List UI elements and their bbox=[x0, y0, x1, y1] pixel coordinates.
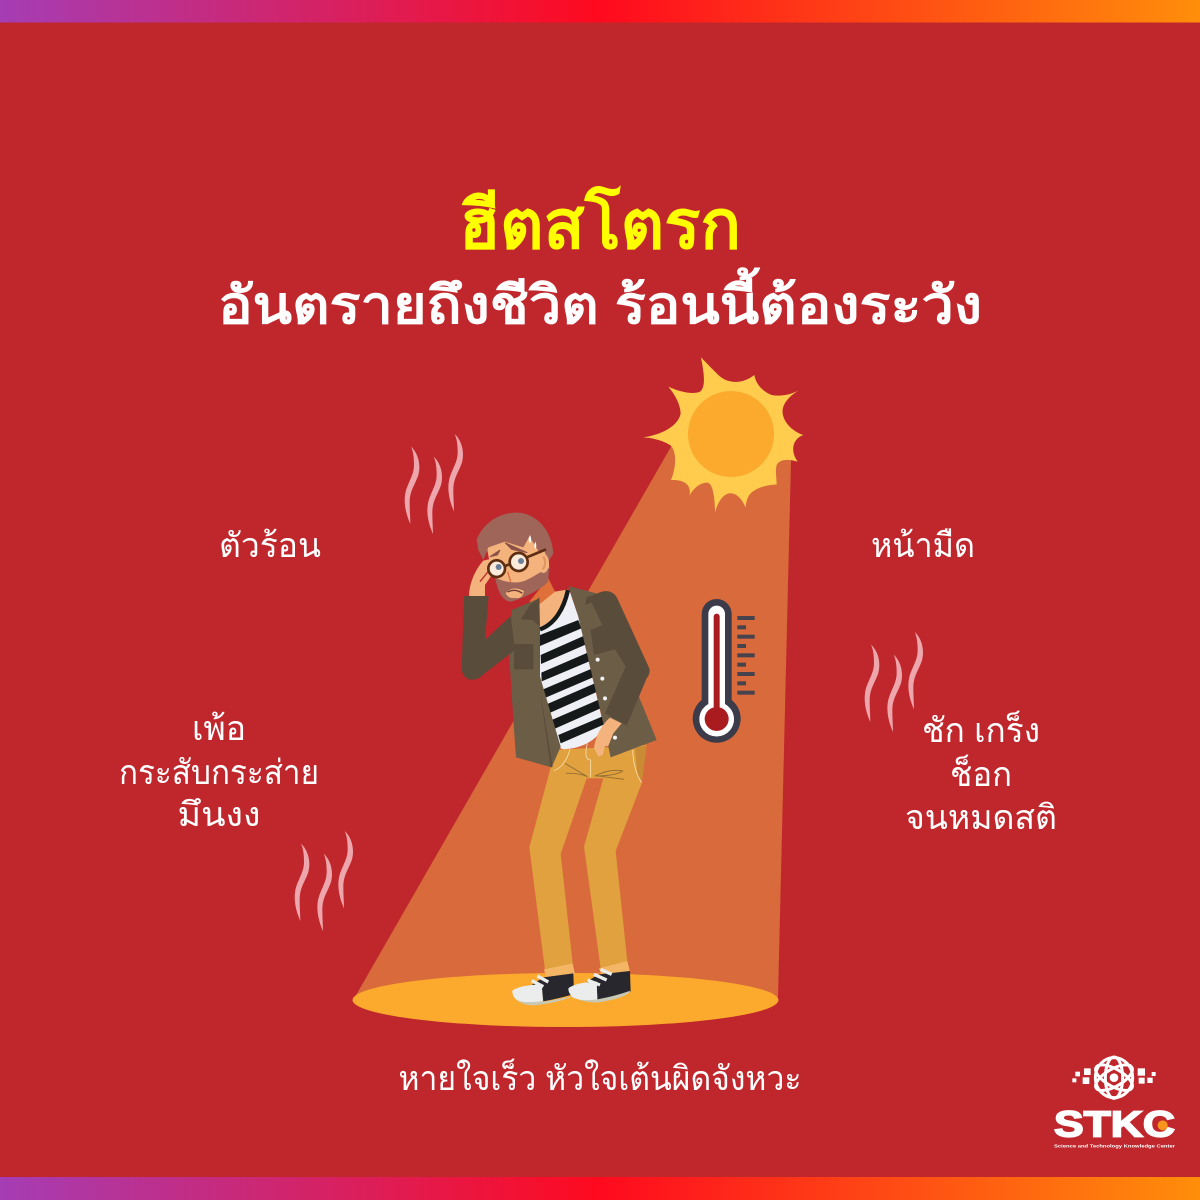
subtitle: อันตรายถึงชีวิต ร้อนนี้ต้องระวัง bbox=[218, 267, 982, 335]
sleeve right bbox=[585, 591, 650, 726]
striped shirt bbox=[540, 590, 604, 749]
pixel squares bbox=[1072, 1068, 1156, 1084]
icon: sun bbox=[643, 357, 803, 513]
icon: heat waves left lower bbox=[295, 831, 353, 931]
label: delirium: กระสับกระส่าย bbox=[119, 754, 319, 792]
icon: heat waves right bbox=[865, 632, 923, 732]
label: delirium bbox=[119, 710, 319, 834]
label: dizzy vision: หน้ามืด bbox=[871, 527, 975, 565]
jacket right panel bbox=[568, 586, 657, 757]
jacket left shade bbox=[540, 690, 553, 767]
label: seizure shock: จนหมดสติ bbox=[905, 799, 1057, 837]
logo: STKC bbox=[1054, 1057, 1175, 1148]
bottom gradient bar bbox=[0, 1177, 1200, 1200]
right shoe bbox=[568, 969, 631, 1003]
label: seizure shock bbox=[905, 710, 1057, 837]
jacket left panel bbox=[509, 598, 561, 767]
head bbox=[477, 513, 553, 602]
tagline: Science and Technology Knowledge Center bbox=[1054, 1143, 1175, 1148]
label: seizure shock: ชัก เกร็ง bbox=[922, 710, 1040, 750]
jacket buttons bbox=[596, 658, 617, 740]
pocket lines bbox=[554, 743, 642, 783]
neck bbox=[529, 578, 555, 607]
trouser creases bbox=[565, 763, 624, 779]
label: breathing and heartbeat: หายใจเร็ว หัวใจเต้นผิดจังหวะ bbox=[398, 1058, 802, 1098]
top gradient bar bbox=[0, 0, 1200, 22]
jacket pocket bbox=[514, 644, 533, 669]
title: ฮีตสโตรก bbox=[459, 185, 741, 263]
trouser shade bbox=[635, 745, 647, 783]
label: delirium: เพ้อ bbox=[192, 710, 246, 748]
label: body hot: ตัวร้อน bbox=[219, 527, 321, 565]
wordmark: STKC bbox=[1054, 1104, 1175, 1145]
sleeve left bbox=[462, 596, 515, 680]
ground spotlight bbox=[352, 973, 778, 1027]
icon: thermometer bbox=[693, 599, 755, 743]
light beam bbox=[355, 445, 791, 997]
cuffs bbox=[544, 963, 575, 980]
icon: atom bbox=[1092, 1057, 1136, 1098]
jacket collar bbox=[521, 597, 540, 627]
label: delirium: มึนงง bbox=[178, 796, 260, 834]
chest bbox=[539, 589, 571, 628]
trousers bbox=[529, 745, 647, 970]
hand at pocket bbox=[594, 718, 622, 757]
hand at head bbox=[469, 558, 493, 596]
figure: man torso and head bbox=[462, 513, 657, 767]
left shoe bbox=[512, 973, 574, 1005]
icon: heat waves left upper bbox=[405, 434, 463, 534]
figure: man legs and shoes bbox=[512, 743, 647, 1005]
label: seizure shock: ช็อก bbox=[950, 754, 1012, 794]
